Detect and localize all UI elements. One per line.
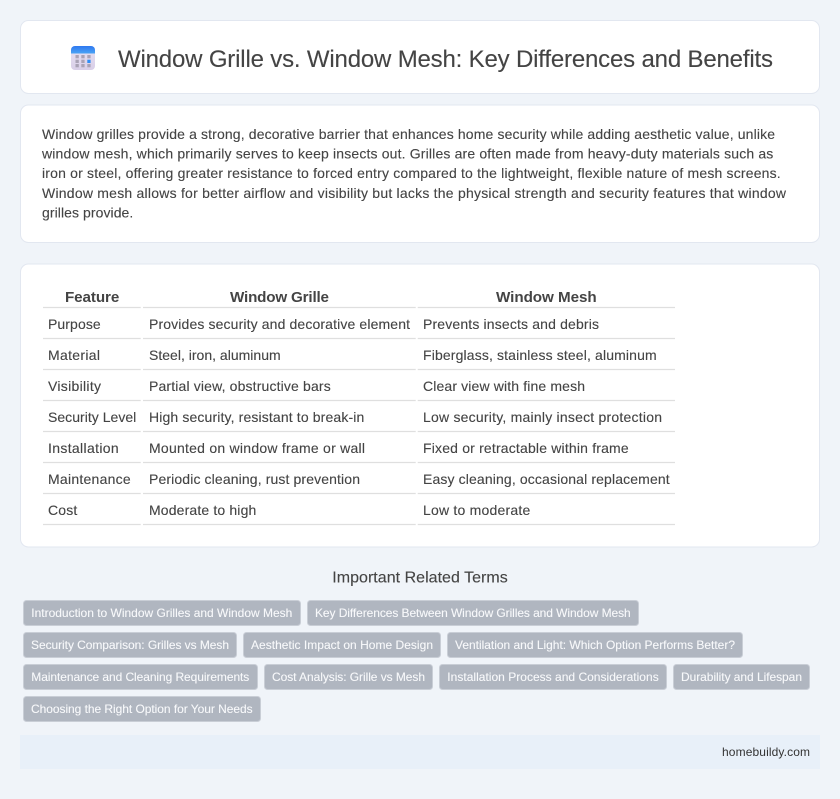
- footer source text: homebuildy.com: [722, 745, 810, 759]
- text block: introduction paragraph: Window mesh allows for better airflow and visibility but lacks the physical strength and security features that window: [42, 185, 787, 201]
- row: material: [48, 347, 657, 363]
- row: visibility: Partial view, obstructive bars: [149, 378, 331, 394]
- text block: introduction paragraph: window mesh, which primarily serves to keep insects out. Grilles are often made from heavy-duty materials such as: [41, 146, 773, 162]
- row: visibility: Clear view with fine mesh: [423, 378, 585, 394]
- row: maintenance: [48, 471, 670, 487]
- tag: Durability and Lifespan: [681, 670, 802, 684]
- row: purpose: Prevents insects and debris: [423, 316, 599, 332]
- row: security level: High security, resistant to break-in: [149, 409, 364, 425]
- row: purpose: [48, 316, 599, 332]
- tag: Cost Analysis: Grille vs Mesh: [272, 670, 425, 684]
- row: material: Material: [48, 347, 100, 363]
- tag: [24, 632, 236, 658]
- row: purpose: Purpose: [48, 316, 101, 332]
- table header row: Window Grille: [230, 289, 329, 306]
- row: visibility: [48, 378, 585, 394]
- tag: Maintenance and Cleaning Requirements: [31, 670, 249, 684]
- row: installation: Mounted on window frame or wall: [149, 440, 365, 456]
- panel: header: [20, 20, 820, 94]
- tag: [24, 664, 258, 690]
- row: maintenance: Maintenance: [48, 471, 131, 487]
- footer: [20, 735, 820, 769]
- table header row: Feature: [65, 289, 119, 306]
- tag: [448, 632, 742, 658]
- row: installation: Fixed or retractable within frame: [423, 440, 629, 456]
- row: material: Fiberglass, stainless steel, aluminum: [423, 347, 657, 363]
- row: security level: Security Level: [48, 409, 136, 425]
- tag: [440, 664, 666, 690]
- row: maintenance: Periodic cleaning, rust prevention: [149, 471, 360, 487]
- text block: introduction paragraph: grilles provide.: [42, 204, 133, 220]
- heading: important related terms: Important Related Terms: [332, 570, 508, 586]
- row: cost: [48, 502, 531, 518]
- tag: Key Differences Between Window Grilles and Window Mesh: [315, 606, 631, 620]
- row: installation: [48, 440, 629, 456]
- title: Window Grille vs. Window Mesh: Key Differences and Benefits: [118, 46, 773, 73]
- text block: introduction paragraph: Window grilles provide a strong, decorative barrier that enhances home security while adding aesthetic value, unlike: [42, 126, 775, 142]
- tag: [244, 632, 440, 658]
- row: material: Steel, iron, aluminum: [149, 347, 281, 363]
- row: installation: Installation: [48, 440, 119, 456]
- tag: Installation Process and Considerations: [447, 670, 659, 684]
- row: security level: [48, 409, 662, 425]
- table header row: [65, 289, 597, 306]
- row: cost: Low to moderate: [423, 502, 531, 518]
- tag: [264, 664, 432, 690]
- row: security level: Low security, mainly insect protection: [423, 409, 662, 425]
- tag: Ventilation and Light: Which Option Performs Better?: [455, 638, 735, 652]
- text block: introduction paragraph: [41, 126, 787, 220]
- row: cost: Cost: [48, 502, 77, 518]
- tag: [24, 600, 300, 626]
- table header row: Window Mesh: [496, 289, 597, 306]
- text block: introduction paragraph: iron or steel, offering greater resistance to forced entry compared to the lightweight, flexible nature of mesh screens.: [42, 165, 781, 181]
- row: visibility: Visibility: [48, 378, 101, 394]
- row: maintenance: Easy cleaning, occasional replacement: [423, 471, 670, 487]
- row: purpose: Provides security and decorative element: [149, 316, 410, 332]
- tag: Introduction to Window Grilles and Window Mesh: [31, 606, 292, 620]
- panel: comparison table: [20, 264, 820, 547]
- tag: [24, 696, 260, 722]
- tag: Aesthetic Impact on Home Design: [251, 638, 433, 652]
- tag: [674, 664, 810, 690]
- tag: [308, 600, 638, 626]
- tag: Choosing the Right Option for Your Needs: [31, 702, 253, 716]
- icon: calendar grid: [71, 46, 95, 70]
- tag: Security Comparison: Grilles vs Mesh: [31, 638, 229, 652]
- panel: related term tags: [24, 600, 810, 722]
- row: cost: Moderate to high: [149, 502, 256, 518]
- panel: introduction: [20, 105, 820, 242]
